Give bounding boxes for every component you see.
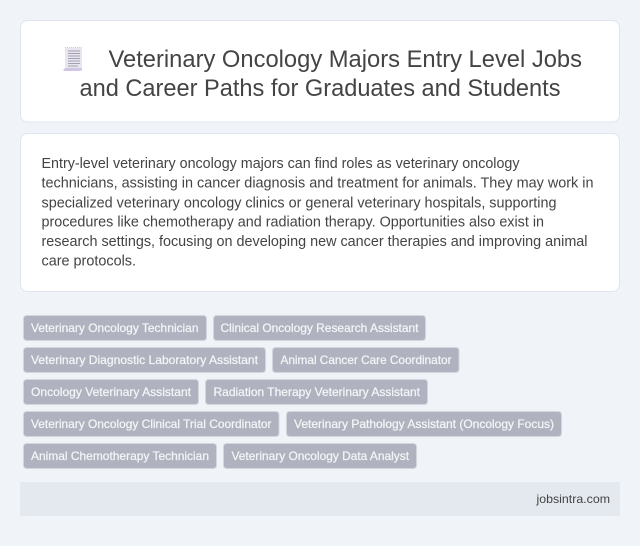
tag: Veterinary Diagnostic Laboratory Assistant — [24, 348, 266, 372]
panel: title card — [20, 20, 620, 122]
footer text: jobsintra.com: jobsintra.com — [535, 492, 610, 506]
title: and Career Paths for Graduates and Students — [80, 75, 560, 102]
title — [80, 46, 582, 102]
tag: Animal Chemotherapy Technician — [24, 444, 216, 468]
tag: Veterinary Oncology Clinical Trial Coordinator — [24, 412, 279, 436]
tag: Radiation Therapy Veterinary Assistant — [206, 380, 428, 404]
title: Veterinary Oncology Majors Entry Level Jobs — [108, 46, 582, 73]
tag: Veterinary Diagnostic Laboratory Assistant: Veterinary Diagnostic Laboratory Assistant — [31, 353, 259, 367]
text block: description: technicians, assisting in cancer diagnosis and treatment for animals. They may work in — [42, 176, 594, 192]
tag: Animal Cancer Care Coordinator: Animal Cancer Care Coordinator — [280, 353, 452, 367]
panel: description card — [20, 134, 620, 292]
text block: description — [42, 156, 594, 270]
tag: Veterinary Oncology Technician: Veterinary Oncology Technician — [31, 321, 198, 335]
tag: Oncology Veterinary Assistant: Oncology Veterinary Assistant — [31, 385, 192, 399]
icon: scroll document — [63, 48, 82, 71]
tag: Radiation Therapy Veterinary Assistant: Radiation Therapy Veterinary Assistant — [214, 385, 421, 399]
text block: description: care protocols. — [42, 254, 136, 270]
tag: Veterinary Pathology Assistant (Oncology Focus): Veterinary Pathology Assistant (Oncology Focus) — [294, 417, 554, 431]
tag: Veterinary Oncology Technician — [24, 316, 206, 340]
text block: description: research settings, focusing on developing new cancer therapies and improving animal — [42, 234, 588, 250]
tag: Veterinary Oncology Data Analyst: Veterinary Oncology Data Analyst — [232, 449, 410, 463]
footer bar — [20, 482, 620, 516]
tag: Oncology Veterinary Assistant — [24, 380, 198, 404]
text block: description: Entry-level veterinary oncology majors can find roles as veterinary oncology — [42, 156, 520, 172]
tag list: entry level jobs — [24, 316, 562, 468]
tag: Veterinary Oncology Clinical Trial Coordinator: Veterinary Oncology Clinical Trial Coordinator — [31, 417, 272, 431]
tag: Clinical Oncology Research Assistant — [214, 316, 426, 340]
tag: Animal Chemotherapy Technician: Animal Chemotherapy Technician — [31, 449, 209, 463]
text block: description: specialized veterinary oncology clinics or general veterinary hospitals, supporting — [42, 196, 556, 212]
tag: Animal Cancer Care Coordinator — [272, 348, 459, 372]
tag: Veterinary Pathology Assistant (Oncology Focus) — [286, 412, 562, 436]
tag: Veterinary Oncology Data Analyst — [224, 444, 416, 468]
tag: Clinical Oncology Research Assistant: Clinical Oncology Research Assistant — [220, 321, 419, 335]
text block: description: procedures like chemotherapy and radiation therapy. Opportunities also exist in — [42, 214, 544, 230]
